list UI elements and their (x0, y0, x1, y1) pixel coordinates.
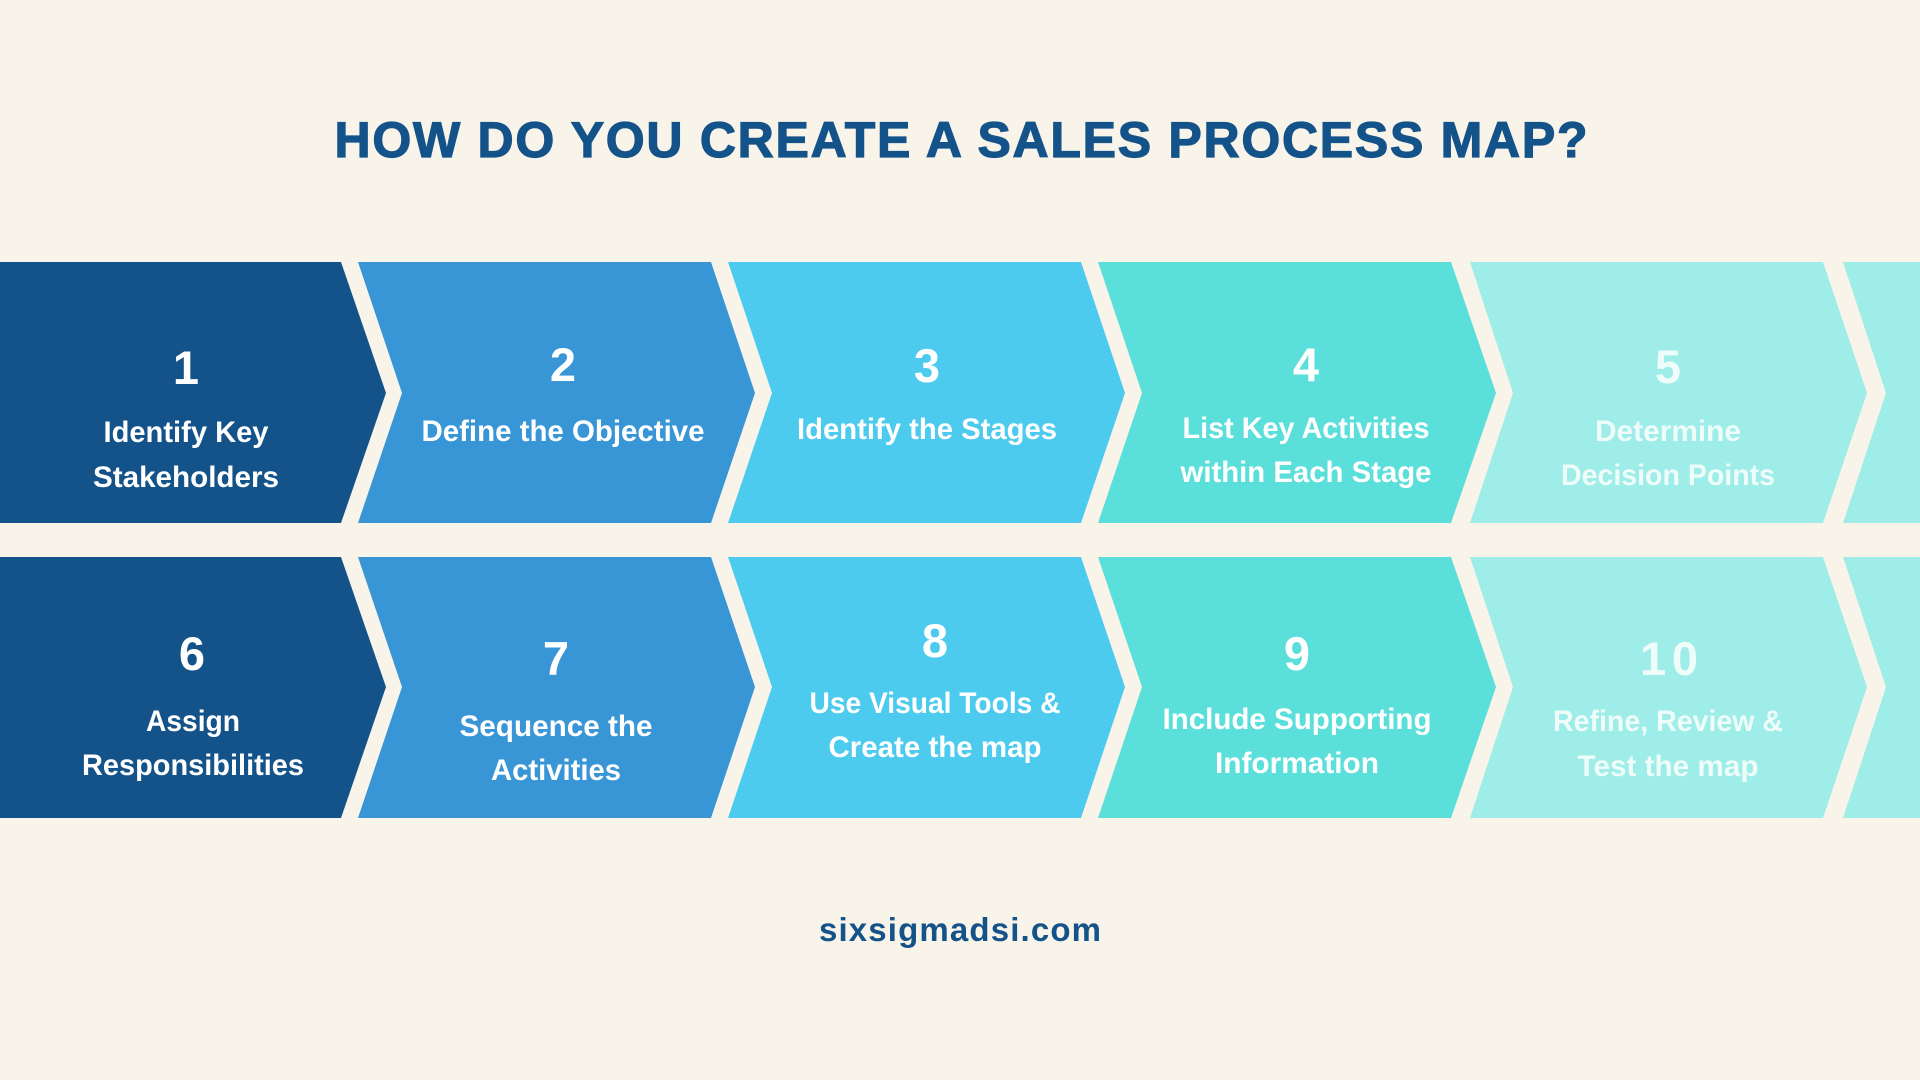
step 5: Determine Decision Points: Decision Points (1561, 459, 1775, 492)
step 6: Assign Responsibilities: 6 (179, 627, 205, 680)
step 6: Assign Responsibilities (0, 557, 386, 818)
footer website: sixsigmadsi.com (819, 911, 1101, 948)
step 9: Include Supporting Information: Include Supporting (1162, 703, 1432, 736)
chevron row 1 (0, 262, 1920, 523)
step 4: List Key Activities within Each Stage: 4 (1293, 338, 1319, 391)
step 10: Refine, Review & Test the map: Test the map (1578, 750, 1758, 783)
step 1: Identify Key Stakeholders: 1 (173, 341, 199, 394)
step 5: Determine Decision Points: Determine (1595, 415, 1741, 448)
step 2: Define the Objective: Define the Objective (422, 415, 704, 448)
chevron row 2 (0, 557, 1920, 818)
step 10: Refine, Review & Test the map: Refine, Review & (1553, 705, 1783, 738)
step 9: Include Supporting Information: 9 (1284, 627, 1310, 680)
step 5: Determine Decision Points: 5 (1655, 340, 1681, 393)
step 2: Define the Objective: 2 (550, 338, 576, 391)
step 7: Sequence the Activities: Activities (491, 754, 621, 787)
step 3: Identify the Stages (728, 262, 1125, 523)
step 7: Sequence the Activities: Sequence the (460, 710, 652, 743)
step 4: List Key Activities within Each Stage: List Key Activities (1182, 412, 1430, 445)
step 5: Determine Decision Points (1470, 262, 1867, 523)
step 4: List Key Activities within Each Stage (1098, 262, 1496, 523)
step 1: Identify Key Stakeholders (0, 262, 386, 523)
step 6: Assign Responsibilities: Responsibilities (82, 749, 304, 782)
step 1: Identify Key Stakeholders: Identify Key (104, 416, 269, 449)
step 8: Use Visual Tools & Create the map: Use Visual Tools & (810, 687, 1060, 720)
step 8: Use Visual Tools & Create the map: Create the map (828, 731, 1042, 764)
step 9: Include Supporting Information (1098, 557, 1496, 818)
step 9: Include Supporting Information: Information (1215, 747, 1379, 780)
step 8: Use Visual Tools & Create the map: 8 (922, 614, 948, 667)
partial chevron right edge (1843, 557, 1920, 818)
step 7: Sequence the Activities (358, 557, 755, 818)
step 10: Refine, Review & Test the map (1470, 557, 1867, 818)
step 3: Identify the Stages: Identify the Stages (797, 413, 1057, 446)
step 4: List Key Activities within Each Stage: within Each Stage (1180, 456, 1432, 489)
title: HOW DO YOU CREATE A SALES PROCESS MAP? (334, 112, 1588, 168)
step 8: Use Visual Tools & Create the map (728, 557, 1125, 818)
step 2: Define the Objective (358, 262, 755, 523)
partial chevron right edge (1843, 262, 1920, 523)
step 7: Sequence the Activities: 7 (543, 632, 569, 685)
step 6: Assign Responsibilities: Assign (146, 705, 240, 738)
step 1: Identify Key Stakeholders: Stakeholders (93, 461, 279, 494)
step 3: Identify the Stages: 3 (914, 339, 940, 392)
step 10: Refine, Review & Test the map: 10 (1640, 632, 1698, 685)
